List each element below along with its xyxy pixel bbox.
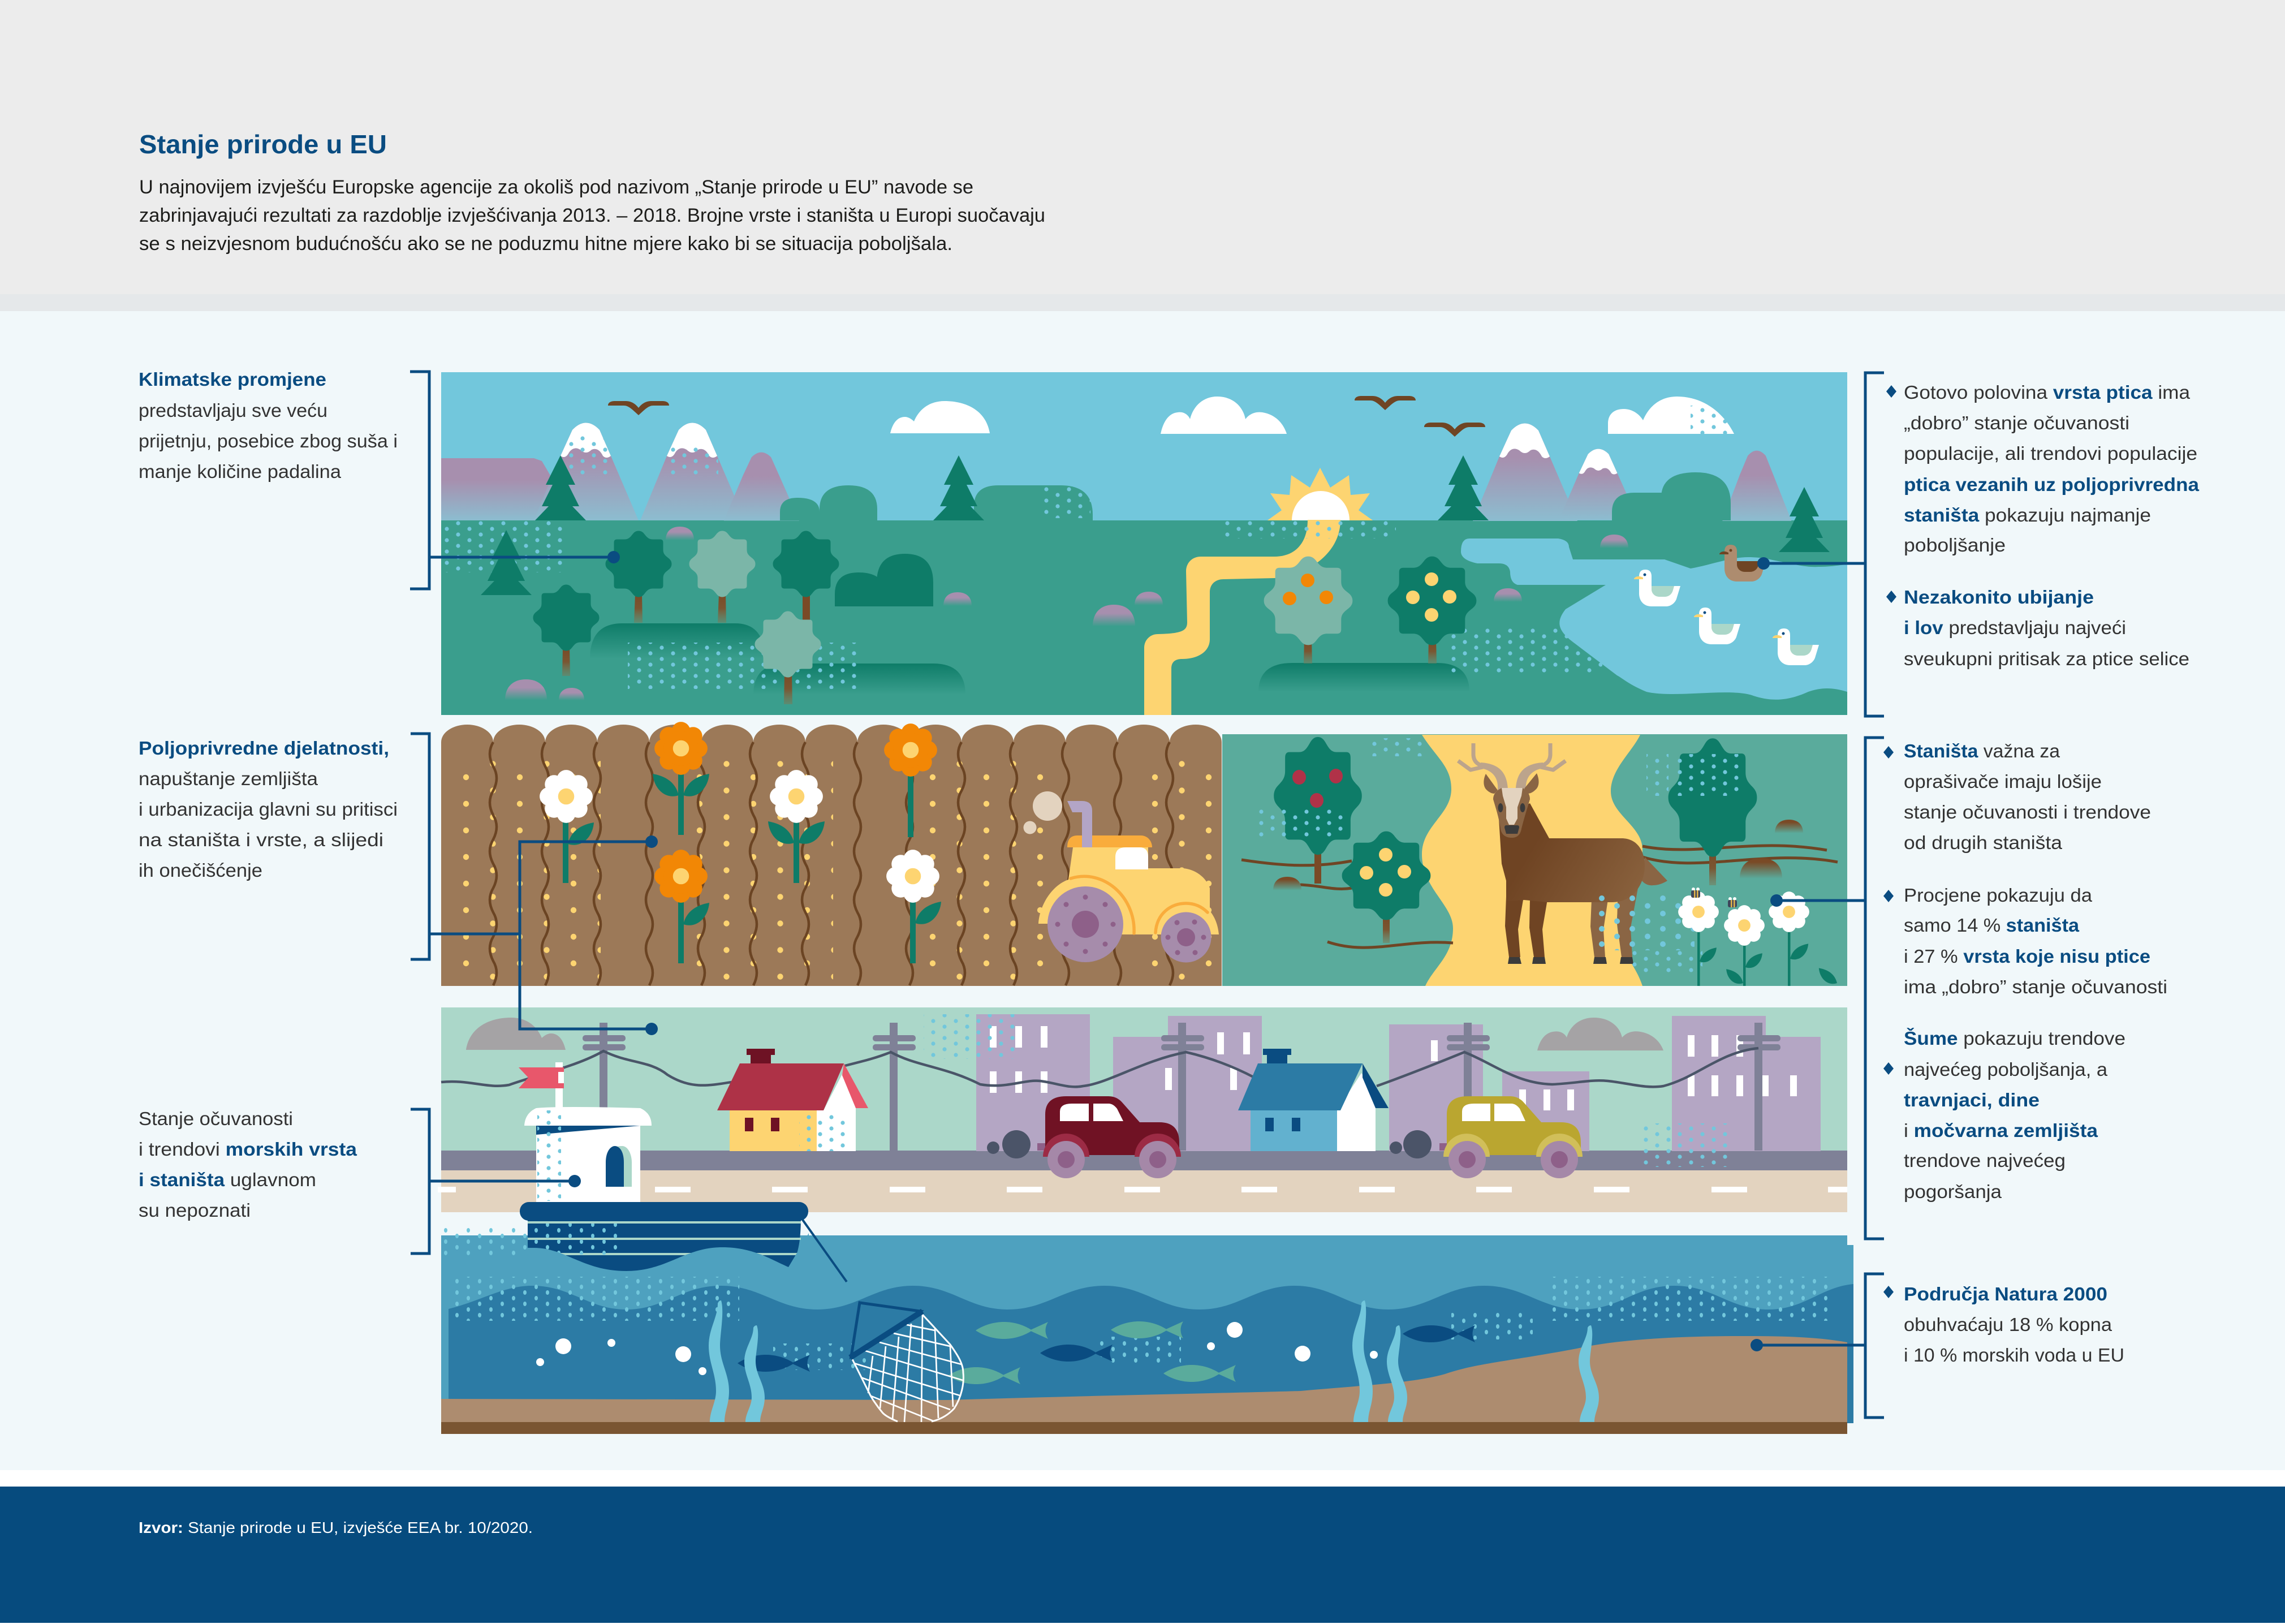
seabed sand [441, 1336, 1847, 1422]
intro text [139, 176, 1045, 255]
left text: agriculture [139, 738, 398, 881]
seabed dark strip [441, 1422, 1847, 1434]
right text: pollinators: i 27 % vrsta koje nisu ptice [1904, 946, 2150, 967]
hills and rocks [505, 527, 1628, 700]
sun [1266, 468, 1374, 522]
panel: sea [441, 1062, 1853, 1434]
buildings [976, 1014, 1821, 1151]
road dashes [438, 1187, 1847, 1192]
meadow dots over deer [1598, 895, 1702, 973]
right text: birds: populacije, ali trendovi populacije [1904, 443, 2197, 464]
title: Stanje prirode u EU [139, 130, 387, 159]
mountains right [1473, 423, 1791, 521]
water surface wave [441, 1233, 809, 1295]
right text: birds: „dobro” stanje očuvanosti [1904, 412, 2129, 433]
fishing line [802, 1219, 847, 1282]
tree with red fruit [1274, 737, 1362, 884]
seed dots [459, 761, 1216, 981]
yellow path [1144, 520, 1340, 715]
power lines [441, 1048, 1758, 1087]
conifers [481, 455, 1830, 595]
grey clouds [466, 1018, 1663, 1050]
red car [987, 1096, 1181, 1178]
left text: agriculture: i urbanizacija glavni su pritisci [139, 799, 398, 820]
boat hull [520, 1202, 808, 1273]
fish [738, 1321, 1475, 1384]
intro text: zabrinjavajući rezultati za razdoblje izvješćivanja 2013. – 2018. Brojne vrste i staništa u Europi suočavaju [139, 205, 1045, 226]
panel: farmland [441, 722, 1222, 986]
right text: birds: sveukupni pritisak za ptice selice [1904, 648, 2189, 669]
right text: pollinators: od drugih staništa [1904, 832, 2063, 853]
trees [533, 531, 839, 704]
right text: forests and grasslands: Šume pokazuju trendove [1904, 1027, 2126, 1049]
dots [1253, 738, 1669, 837]
boat cabin and flag [519, 1062, 652, 1205]
house red [717, 1049, 868, 1151]
right text: birds: Nezakonito ubijanje [1904, 587, 2094, 608]
bushes on horizon [780, 472, 1731, 520]
flowers [540, 722, 941, 963]
left text: climate change: predstavljaju sve veću [139, 400, 327, 421]
right text: Natura 2000 [1883, 1283, 2124, 1365]
panel: landscape with mountains and lake [441, 372, 1847, 715]
branches [1241, 846, 1838, 947]
right text: forests and grasslands [1883, 1027, 2126, 1202]
right text: Natura 2000: obuhvaćaju 18 % kopna [1904, 1314, 2112, 1335]
callout: habitats bracket and leader [1770, 738, 1884, 1239]
left text: agriculture: na staništa i vrste, a slijedi [139, 829, 383, 850]
right text: pollinators: Staništa važna za [1904, 740, 2060, 761]
right text: pollinators [1883, 740, 2167, 997]
deep water [449, 1284, 1853, 1423]
left text: agriculture: Poljoprivredne djelatnosti, [139, 738, 389, 759]
intro text: se s neizvjesnom budućnošću ako se ne poduzmu hitne mjere kako bi se situacija poboljšala. [139, 233, 952, 255]
callout: marine bracket and leader [411, 1109, 581, 1253]
panel: town with road [438, 1007, 1847, 1212]
right text: forests and grasslands: najvećeg poboljšanja, a [1904, 1059, 2108, 1080]
right text: birds: Gotovo polovina vrsta ptica ima [1904, 382, 2191, 403]
fruit trees [1264, 557, 1476, 664]
callout: birds bracket and leader [1757, 373, 1884, 716]
surface dots [442, 1227, 530, 1255]
left text: climate change: prijetnju, posebice zbog suša i [139, 430, 398, 451]
building windows [990, 1026, 1797, 1110]
bubbles [536, 1322, 1378, 1375]
right text: Natura 2000: i 10 % morskih voda u EU [1904, 1345, 2124, 1365]
front legs [1505, 897, 1547, 957]
daisies and bees [1678, 888, 1837, 986]
seaweed [709, 1300, 1599, 1422]
fishing net [850, 1303, 963, 1422]
left text: marine: su nepoznati [139, 1200, 251, 1221]
deer [1458, 743, 1667, 964]
right text: pollinators: samo 14 % staništa [1904, 915, 2080, 936]
left text: climate change [139, 369, 398, 482]
right text: birds: i lov predstavljaju najveći [1904, 617, 2126, 638]
house blue [1238, 1049, 1389, 1151]
birds [608, 396, 1485, 437]
left text: marine [139, 1108, 357, 1221]
right text: pollinators: Procjene pokazuju da [1904, 885, 2093, 906]
callout: Natura 2000 bracket and leader [1751, 1274, 1884, 1418]
right text: forests and grasslands: pogoršanja [1904, 1181, 2002, 1202]
left text: marine: Stanje očuvanosti [139, 1108, 293, 1129]
yellow meadow band [1422, 735, 1642, 986]
left text: marine: i trendovi morskih vrsta [139, 1139, 357, 1160]
mountains left [441, 423, 799, 520]
right text: pollinators: ima „dobro” stanje očuvanosti [1904, 976, 2167, 997]
yellow car [1390, 1096, 1583, 1178]
water dots [452, 1277, 1834, 1370]
hind legs [1590, 888, 1638, 957]
right text: birds: ptica vezanih uz poljoprivredna [1904, 474, 2200, 495]
tractor [1024, 791, 1219, 963]
left text: agriculture: ih onečišćenje [139, 860, 262, 881]
footer band [0, 1487, 2285, 1623]
left text: marine: i staništa uglavnom [139, 1169, 316, 1190]
main body background [0, 311, 2285, 1470]
right text: forests and grasslands: trendove najvećeg [1904, 1150, 2066, 1171]
right text: birds: poboljšanje [1904, 535, 2006, 555]
meadow dots [441, 520, 1602, 689]
right text: pollinators: oprašivače imaju lošije [1904, 771, 2102, 792]
callout: climate bracket and leader [410, 372, 620, 589]
right text: pollinators: stanje očuvanosti i trendove [1904, 802, 2151, 822]
tall tree [1669, 738, 1757, 885]
brown duck [1719, 545, 1766, 581]
city dots [924, 1014, 1730, 1167]
header band [0, 0, 2285, 311]
callout: agriculture bracket and leaders [411, 734, 658, 1035]
lake [1461, 539, 1847, 700]
intro text: U najnovijem izvješću Europske agencije za okoliš pod nazivom „Stanje prirode u EU” navode se [139, 176, 973, 198]
utility poles [583, 1023, 1780, 1151]
tree with yellow fruit [1342, 832, 1430, 943]
right text: forests and grasslands: i močvarna zemljišta [1904, 1120, 2098, 1141]
left text: agriculture: napuštanje zemljišta [139, 768, 318, 789]
brown field with scalloped top [441, 725, 1222, 986]
panel: pollinator habitat with deer [1222, 734, 1847, 986]
furrows [490, 742, 1173, 985]
right text: Natura 2000: Područja Natura 2000 [1904, 1283, 2107, 1304]
mounds [1273, 820, 1803, 890]
left text: climate change: Klimatske promjene [139, 369, 326, 390]
clouds [890, 397, 1734, 434]
source note: Izvor: Stanje prirode u EU, izvješće EEA br. 10/2020. [139, 1519, 533, 1536]
right text: forests and grasslands: travnjaci, dine [1904, 1089, 2040, 1110]
white swans [1634, 570, 1819, 665]
right text: birds [1886, 382, 2200, 669]
left text: climate change: manje količine padalina [139, 461, 342, 482]
right text: birds: staništa pokazuju najmanje [1904, 505, 2151, 525]
